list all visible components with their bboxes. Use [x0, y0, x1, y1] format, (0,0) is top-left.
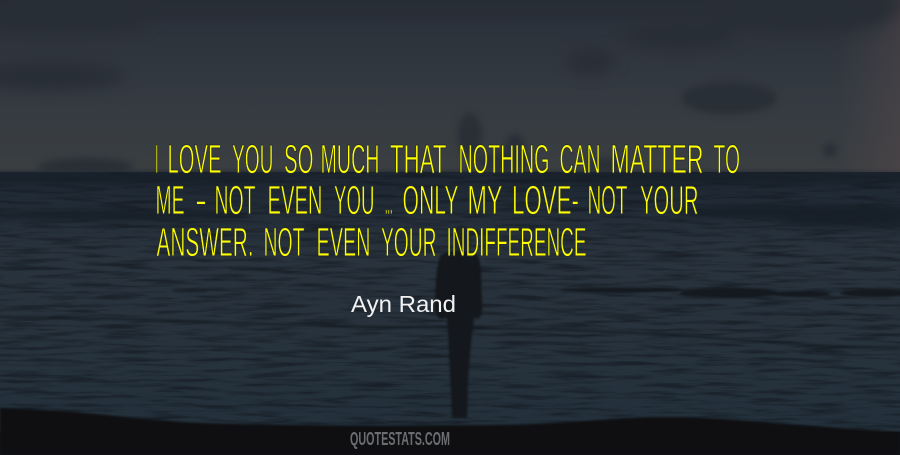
line 2: ... — [385, 177, 392, 223]
quote card: TO — [714, 136, 740, 182]
silhouette of standing figure — [435, 225, 482, 418]
background: sky — [0, 0, 900, 176]
line 3: EVEN — [316, 219, 370, 265]
line 1 — [156, 136, 740, 182]
watermark: QUOTESTATS.COM — [350, 428, 450, 449]
line 1: NOTHING — [458, 136, 550, 182]
line 1: I — [156, 136, 158, 182]
line 1: THAT — [390, 136, 446, 182]
quote text — [156, 136, 740, 265]
line 1: LOVE — [168, 136, 222, 182]
dark wave crest — [70, 268, 900, 298]
line 2: YOU — [334, 177, 374, 223]
line 2: ME — [156, 177, 184, 223]
shore line — [0, 317, 900, 348]
line 2: LOVE- — [512, 177, 579, 223]
author name: Ayn Rand — [351, 291, 456, 317]
background: dark sand — [0, 408, 900, 455]
line 3: ANSWER. — [156, 219, 254, 265]
line 2: EVEN — [268, 177, 322, 223]
line 1: SO — [284, 136, 314, 182]
line 2 — [156, 177, 698, 223]
line 1: MATTER — [610, 136, 704, 182]
line 2: ONLY — [402, 177, 458, 223]
line 2: - — [195, 177, 207, 223]
quote text: INDIFFERENCE — [446, 219, 586, 265]
line 3: YOUR — [381, 219, 436, 265]
line 3 — [156, 219, 586, 265]
quote text: YOUR — [640, 177, 698, 223]
line 3: NOT — [264, 219, 304, 265]
line 1: MUCH — [320, 136, 380, 182]
line 2: MY — [468, 177, 502, 223]
line 2: NOT — [214, 177, 256, 223]
line 1: YOU — [232, 136, 274, 182]
background: sea — [0, 172, 900, 432]
line 2: NOT — [588, 177, 628, 223]
line 1: CAN — [560, 136, 600, 182]
